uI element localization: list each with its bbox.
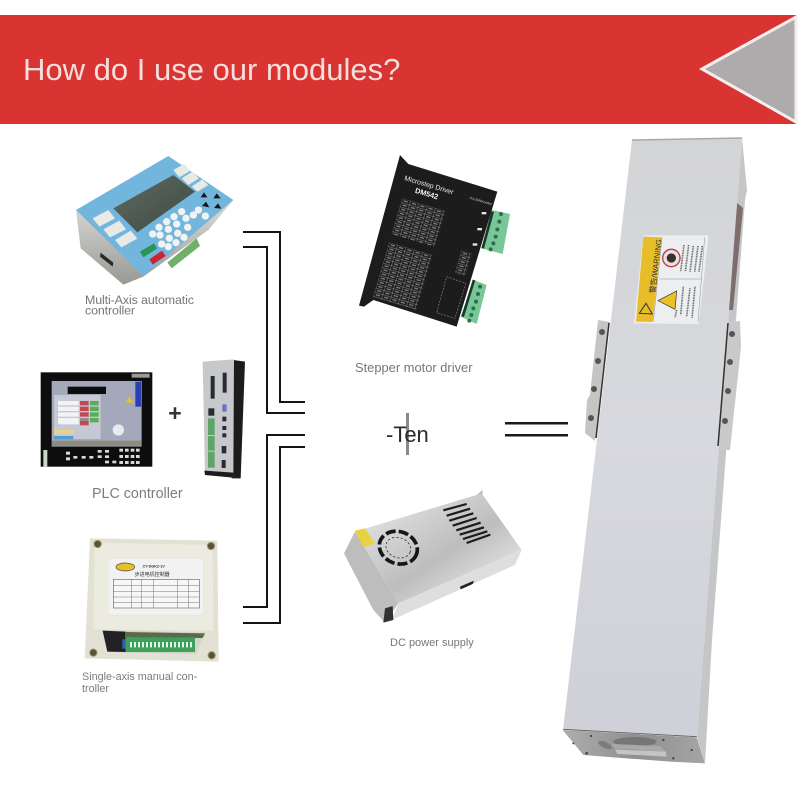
housing inner edge: [93, 543, 213, 631]
left mounting bracket: [585, 320, 610, 441]
arrow keys: [201, 192, 221, 209]
device: multi-axis automatic controller: [76, 156, 233, 285]
red banner background: [0, 15, 796, 124]
wire 4: [243, 447, 305, 623]
equals lines: [505, 422, 568, 436]
connector text: -Ten: [386, 422, 429, 447]
wire 3: [243, 435, 305, 607]
label base: [634, 235, 709, 324]
warning text: 警告/WARNING: [647, 239, 664, 294]
panel badge: [132, 374, 150, 378]
supply side face: [344, 532, 398, 623]
device: stepper motor driver: [359, 155, 510, 327]
terminal screws: [467, 212, 503, 323]
label: multi-axis automatic controller: controller: [85, 304, 135, 318]
lower line: [505, 434, 568, 436]
hazard triangle: [658, 291, 677, 309]
terminal recess: [102, 630, 205, 654]
specification label: 步进电机控制器: [135, 571, 170, 578]
black connector block: [103, 631, 126, 652]
D-sub connectors: [208, 373, 227, 468]
green terminal: [167, 238, 200, 268]
left white keys: [93, 164, 208, 247]
controller side slot: [100, 253, 113, 267]
edge line: [563, 729, 697, 737]
label dividers: [653, 237, 705, 322]
connector symbol: [386, 413, 429, 455]
wire 1: [243, 232, 305, 402]
unit black top and bottom: [204, 471, 233, 478]
upper line: [505, 422, 568, 424]
controller screen: [113, 175, 195, 232]
panel buttons: [66, 449, 140, 464]
driver model: DM542: [414, 186, 439, 201]
yellow label: [355, 528, 375, 547]
green terminals: [208, 418, 215, 468]
plus sign: +: [168, 400, 182, 426]
label: multi-axis automatic controller: Multi-Axis automatic: [85, 293, 194, 307]
driver heading: Microstep Driver: [403, 175, 455, 197]
module end plate: [563, 729, 705, 763]
label: DC power supply: DC power supply: [390, 637, 474, 649]
blue port: [122, 639, 125, 649]
label small print: [675, 245, 702, 318]
linear module: [563, 138, 747, 763]
panel body: [41, 372, 152, 467]
vent slits: [443, 504, 490, 543]
yellow strip: [636, 237, 662, 322]
terminal labels: [130, 637, 193, 653]
module side face: [697, 138, 747, 763]
label: single-axis manual controller: troller: [82, 683, 109, 695]
vertical bar: [406, 413, 409, 455]
wire 2: [243, 247, 305, 413]
device: single-axis manual controller: [85, 538, 219, 662]
status rows: [52, 395, 141, 446]
label: single-axis manual controller: Single-axis manual con-: [82, 671, 197, 683]
bore inner wall: [612, 744, 666, 752]
prohibition glyph: [667, 253, 676, 263]
bore: [613, 737, 657, 746]
warning label: [634, 235, 709, 324]
terminal top band: [125, 632, 205, 638]
signal heading: PUL/DIR/ALARM: [469, 196, 493, 206]
driver body: [359, 155, 497, 327]
green terminal lower: [461, 280, 487, 324]
warning triangle: [639, 303, 652, 314]
mounting holes: [572, 735, 693, 759]
unit heatsink: [232, 360, 245, 478]
blue side strip: [135, 382, 141, 407]
controller front face: [76, 156, 233, 276]
supply top face: [355, 493, 522, 603]
controller housing: [76, 200, 233, 285]
wiring: controller connections: [243, 232, 305, 623]
banner: [0, 15, 796, 124]
green terminal upper: [482, 210, 510, 254]
pulse table: [373, 242, 432, 310]
banner triangle: [702, 17, 796, 122]
prohibition sign: [663, 249, 680, 267]
device: PLC control unit: [203, 359, 245, 478]
red stop key: [149, 251, 166, 265]
label: PLC controller: PLC controller: [92, 486, 183, 502]
title: How do I use our modules?: [23, 52, 400, 87]
panel screen header: [68, 387, 106, 394]
corner bracket: [383, 606, 393, 623]
bore highlight: [615, 749, 667, 757]
device: DC power supply: [344, 490, 522, 623]
signal indicators: [473, 212, 486, 246]
module top edge: [632, 138, 742, 140]
corner screws: [90, 540, 215, 659]
end plate face: [563, 730, 705, 763]
supply front strip: [392, 550, 522, 620]
side lug: [597, 739, 613, 751]
blue port: [222, 404, 227, 412]
green terminal block: [126, 637, 195, 652]
supply top lip: [477, 490, 483, 498]
housing: [85, 538, 219, 662]
right mounting bracket: [718, 321, 741, 450]
panel screen: [52, 381, 142, 447]
device: PLC touch panel: [41, 372, 152, 467]
dip switch: [455, 251, 472, 276]
number keypad: [149, 206, 209, 250]
specification label: [108, 558, 203, 615]
current table: [392, 198, 445, 247]
green start key: [140, 243, 157, 257]
label: stepper motor driver: Stepper motor driver: [355, 360, 473, 375]
side face dark section: [728, 203, 743, 310]
fan grille: [375, 526, 422, 569]
terminal dark edges: [463, 212, 493, 317]
panel left strip: [43, 450, 47, 467]
unit front: [203, 359, 234, 478]
module front face: [563, 138, 742, 737]
power block outline: [437, 277, 466, 318]
specification label: CY-DGKZ-1V: [143, 565, 165, 569]
front notch: [460, 581, 474, 589]
